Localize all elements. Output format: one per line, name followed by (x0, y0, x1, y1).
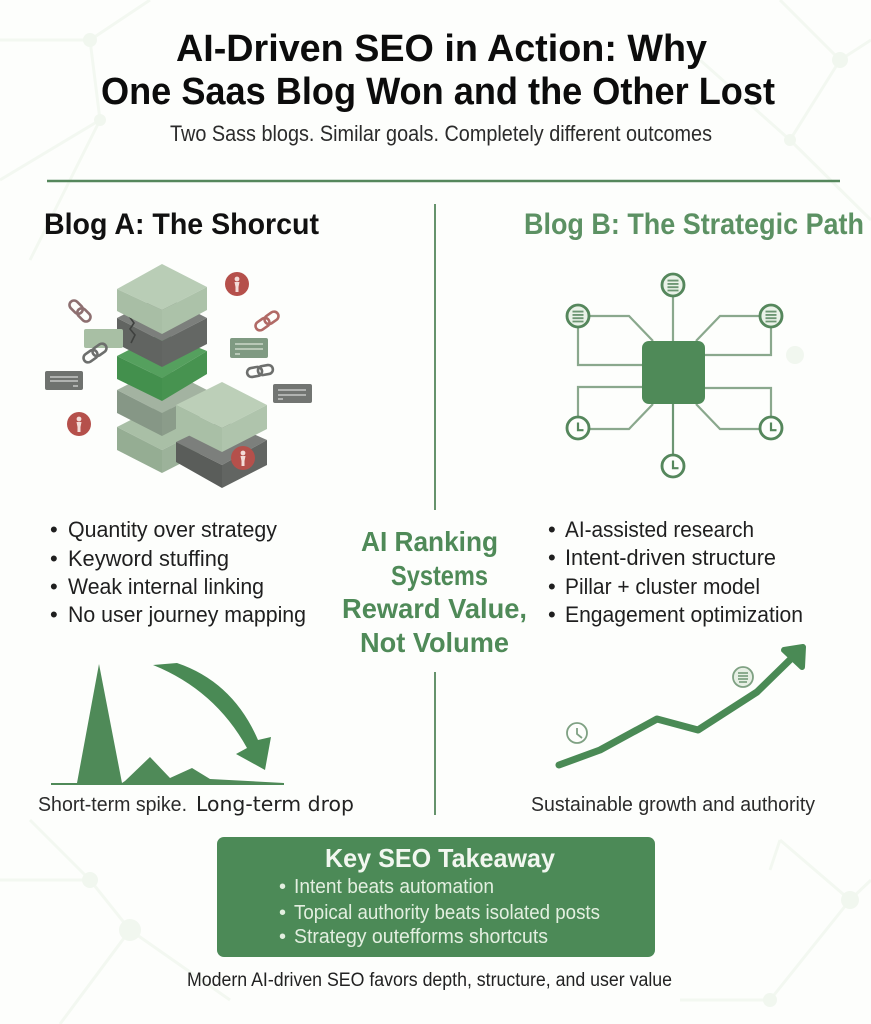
bullet list: Blog A: Quantity over strategy (68, 517, 277, 542)
hub square (642, 341, 705, 404)
bullet list: Blog A: Keyword stuffing (68, 546, 229, 571)
footer note: Modern AI-driven SEO favors depth, structure, and user value (187, 970, 672, 991)
caption: sustainable growth: Sustainable growth and authority (531, 794, 815, 816)
takeaway heading: Key SEO Takeaway (325, 843, 556, 873)
block 2 dark (117, 295, 207, 367)
title (101, 28, 775, 113)
icon: clock (567, 723, 587, 743)
takeaway bullets: • (279, 926, 286, 948)
card dark right (273, 384, 312, 403)
bullet list: Blog A: • (50, 546, 58, 571)
bullet list: Blog A: • (50, 574, 58, 599)
bullet list: Blog B: AI-assisted research (565, 517, 754, 542)
bullet list: Blog B: Intent-driven structure (565, 545, 776, 570)
chart: growth line (559, 647, 803, 765)
heading: Blog A: Blog A: The Shorcut (44, 208, 319, 241)
bullet list: Blog A (50, 517, 306, 627)
center message: Systems (391, 560, 488, 591)
arrow head (784, 647, 803, 667)
warning badges (67, 272, 255, 470)
bullet list: Blog B: Engagement optimization (565, 602, 803, 627)
takeaway bullets: Intent beats automation (294, 876, 494, 898)
card dark left (45, 371, 83, 390)
nodes (567, 274, 782, 477)
bullet list: Blog B: • (548, 574, 556, 599)
bullet list: Blog A: Weak internal linking (68, 574, 264, 599)
illustration: collapsing block stack (45, 264, 312, 488)
takeaway bullets: Strategy outefforms shortcuts (294, 926, 548, 948)
block side dark (176, 420, 267, 488)
block 3 green (117, 333, 207, 401)
bullet list: Blog B: • (548, 517, 556, 542)
takeaway bullets (279, 876, 600, 948)
card light (84, 329, 123, 348)
chart: spike and drop (51, 663, 284, 785)
bullet list: Blog B: • (548, 602, 556, 627)
illustration: hub network (567, 274, 782, 477)
bullet list: Blog A: No user journey mapping (68, 602, 306, 627)
subtitle: Two Sass blogs. Similar goals. Completely different outcomes (170, 121, 712, 146)
bullet list: Blog B: • (548, 545, 556, 570)
takeaway bullets: • (279, 876, 286, 898)
takeaway bullets: Topical authority beats isolated posts (294, 902, 600, 924)
block side light (176, 382, 267, 452)
title: AI-Driven SEO in Action: Why (176, 28, 707, 70)
center message: AI Ranking (361, 526, 498, 557)
title: One Saas Blog Won and the Other Lost (101, 71, 775, 113)
center message (342, 526, 527, 658)
caption: long-term drop: Long-term drop (196, 792, 354, 816)
caption: short-term spike: Short-term spike. (38, 794, 187, 816)
block 4 (117, 367, 207, 436)
takeaway bullets: • (279, 902, 286, 924)
bullet list: Blog A: • (50, 602, 58, 627)
link icons (68, 299, 280, 378)
block 1 light (117, 264, 207, 334)
bullet list: Blog B: Pillar + cluster model (565, 574, 760, 599)
panel: key takeaway (217, 837, 655, 957)
arrow: decline (153, 663, 271, 770)
center message: Not Volume (360, 627, 509, 658)
card green (230, 338, 268, 358)
block 5 (117, 404, 207, 473)
bullet list: Blog B (548, 517, 803, 627)
bullet list: Blog A: • (50, 517, 58, 542)
center message: Reward Value, (342, 593, 527, 624)
icon: document (733, 667, 753, 687)
